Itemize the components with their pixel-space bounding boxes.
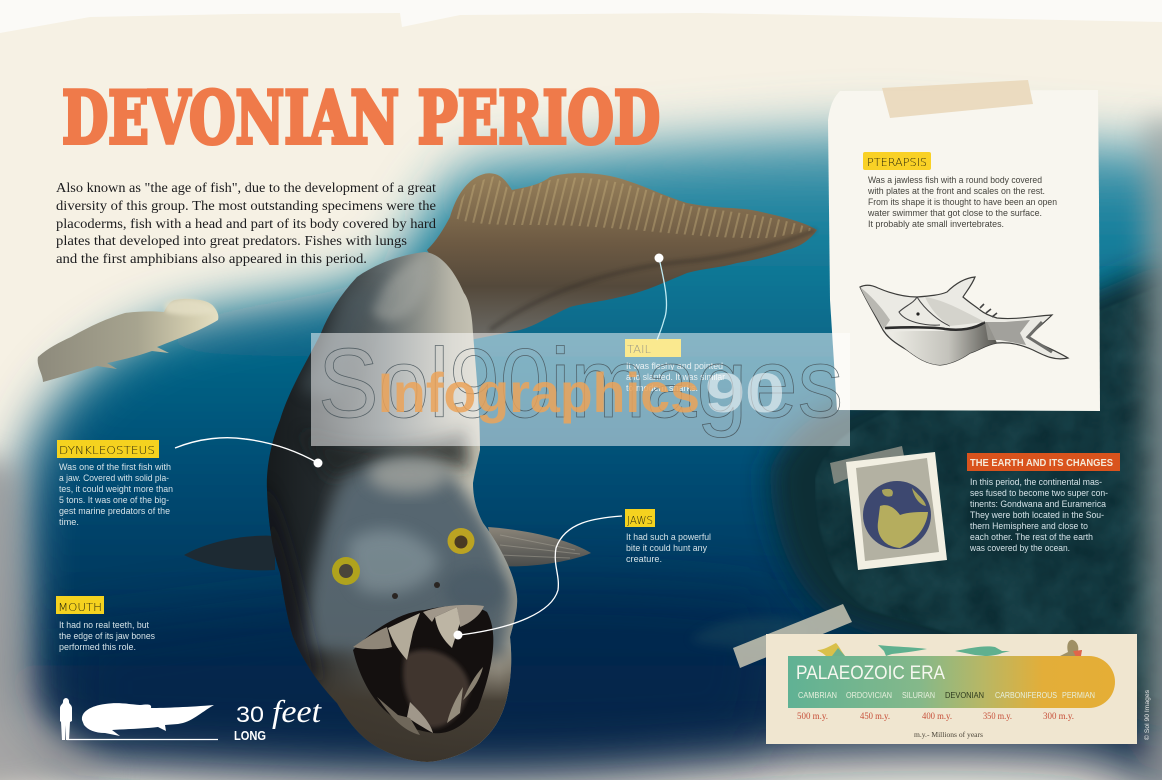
panel: Palaeozoic era timeline: SILURIAN [902, 691, 935, 700]
tape [733, 604, 852, 668]
callout: Dunkleosteus: tes, it could weight more than [59, 484, 173, 494]
panel: Palaeozoic era timeline: 450 m.y. [860, 711, 890, 721]
panel: Palaeozoic era timeline: 400 m.y. [922, 711, 952, 721]
scale comparison [60, 693, 322, 743]
watermark: Sol90images [318, 328, 843, 438]
callout: tail: and slanted. It was similar [626, 372, 725, 382]
callout: jaws: It had such a powerful [626, 532, 711, 542]
globe [863, 481, 931, 549]
panel: earth and its changes: thern Hemisphere and close to [970, 521, 1088, 531]
callout: tail [625, 254, 725, 393]
panel: earth and its changes: was covered by the ocean. [969, 543, 1070, 553]
callout: jaws: JAWS [627, 514, 653, 527]
intro text: diversity of this group. The most outstanding specimens were the [56, 198, 436, 213]
callout: tail: It was fleshy and pointed [626, 361, 723, 371]
callout: jaws: creature. [626, 554, 662, 564]
watermark: Infographics [378, 361, 700, 424]
panel: earth and its changes: They were both located in the Sou- [970, 510, 1104, 520]
grey left edge [0, 440, 120, 780]
intro text: placoderms, fish with a head and part of its body covered by hard [56, 216, 436, 231]
fish: small placoderm in the distance [38, 299, 218, 382]
panel: Palaeozoic era timeline: 300 m.y. [1043, 711, 1074, 721]
panel: Palaeozoic era timeline [733, 604, 1137, 744]
scale comparison: LONG [234, 728, 266, 743]
callout: Dunkleosteus: Was one of the first fish with [59, 462, 171, 472]
face [300, 461, 515, 660]
callout: mouth: It had no real teeth, but [59, 620, 149, 630]
callout: Dunkleosteus: 5 tons. It was one of the big- [59, 495, 169, 505]
panel: Palaeozoic era timeline: PALAEOZOIC ERA [796, 663, 945, 684]
panel: Palaeozoic era timeline: DEVONIAN [945, 691, 984, 700]
callout: tail: TAIL [627, 343, 651, 356]
callout: Dunkleosteus: time. [59, 517, 79, 527]
panel: Palaeozoic era timeline: ORDOVICIAN [846, 691, 892, 700]
callout: Dunkleosteus [57, 438, 322, 527]
panel: earth and its changes: each other. The rest of the earth [970, 532, 1093, 542]
panel: Pterapsis note [828, 80, 1100, 411]
deep bottom tint [70, 585, 780, 759]
panel: earth and its changes: tinents: Gondwana and Euramerica [970, 499, 1106, 509]
pectoral fins [184, 527, 591, 570]
callout: mouth: performed this role. [59, 642, 136, 652]
neck shadow [300, 430, 470, 480]
panel: Pterapsis note: From its shape it is thought to have been an open [868, 197, 1057, 207]
intro text: Also known as "the age of fish", due to the development of a great [56, 180, 436, 195]
scale comparison: 30 [236, 702, 264, 727]
callout: jaws: bite it could hunt any [626, 543, 707, 553]
credit: © Sol 90 Images [1143, 689, 1151, 740]
panel: Palaeozoic era timeline: m.y.- Millions of years [914, 730, 983, 739]
callout: jaws [454, 509, 711, 640]
shoulder shading [370, 255, 429, 321]
callout: Dunkleosteus: a jaw. Covered with solid pla- [59, 473, 169, 483]
panel: earth and its changes: ses fused to become two super con- [970, 488, 1108, 498]
watermark: 90 [705, 361, 785, 424]
scale comparison: feet [272, 693, 322, 729]
panel: Palaeozoic era timeline: PERMIAN [1062, 691, 1095, 700]
panel: Pterapsis note: PTERAPSIS [867, 156, 927, 169]
intro text: plates that developed into great predators. Fishes with lungs [56, 233, 407, 248]
panel: Palaeozoic era timeline: 500 m.y. [797, 711, 828, 721]
callout: tail: to modern sharks. [626, 383, 698, 393]
intro text: and the first amphibians also appeared in this period. [56, 251, 367, 266]
panel: earth and its changes [830, 446, 1120, 570]
icon: Dunkleosteus silhouette [82, 703, 214, 736]
orange heading [967, 453, 1120, 471]
panel: Palaeozoic era timeline: 350 m.y. [983, 711, 1012, 721]
panel: earth and its changes: In this period, the continental mas- [970, 477, 1102, 487]
distant coral [690, 617, 810, 650]
tape [882, 80, 1033, 118]
body and head silhouette [260, 250, 530, 770]
tail [427, 173, 817, 340]
panel: Palaeozoic era timeline: CAMBRIAN [798, 691, 837, 700]
panel: Palaeozoic era timeline: CARBONIFEROUS [995, 691, 1057, 700]
era band [788, 656, 1115, 708]
lower jaw [308, 638, 512, 762]
panel: Pterapsis note: It probably ate small invertebrates. [868, 219, 1004, 229]
teeth [353, 627, 392, 649]
icon: human silhouette [60, 698, 72, 740]
illustration: Dunkleosteus [184, 173, 817, 770]
intro text [56, 180, 436, 266]
eyes [332, 528, 474, 599]
dark rock mass at right [770, 260, 1162, 735]
mouth [353, 605, 493, 735]
label [863, 152, 931, 170]
illustration: Pterapsis sketch [860, 277, 1068, 365]
panel: Pterapsis note: Was a jawless fish with a round body covered [868, 175, 1042, 185]
right edge fade [1145, 120, 1162, 780]
callout: mouth: MOUTH [58, 601, 102, 614]
panel: earth and its changes: THE EARTH AND ITS CHANGES [970, 457, 1113, 469]
photo frame [846, 452, 947, 570]
panel: Pterapsis note: with plates at the front and scales on the rest. [867, 186, 1045, 196]
callout: mouth [56, 596, 155, 652]
creatures on timeline [817, 640, 1082, 657]
panel: Pterapsis note: water swimmer that got close to the surface. [867, 208, 1042, 218]
callout: Dunkleosteus: gest marine predators of the [59, 506, 170, 516]
tape [830, 446, 904, 484]
callout: mouth: the edge of its jaw bones [59, 631, 155, 641]
title: DEVONIAN PERIOD [62, 75, 660, 160]
callout: Dunkleosteus: DYNKLEOSTEUS [59, 444, 155, 457]
